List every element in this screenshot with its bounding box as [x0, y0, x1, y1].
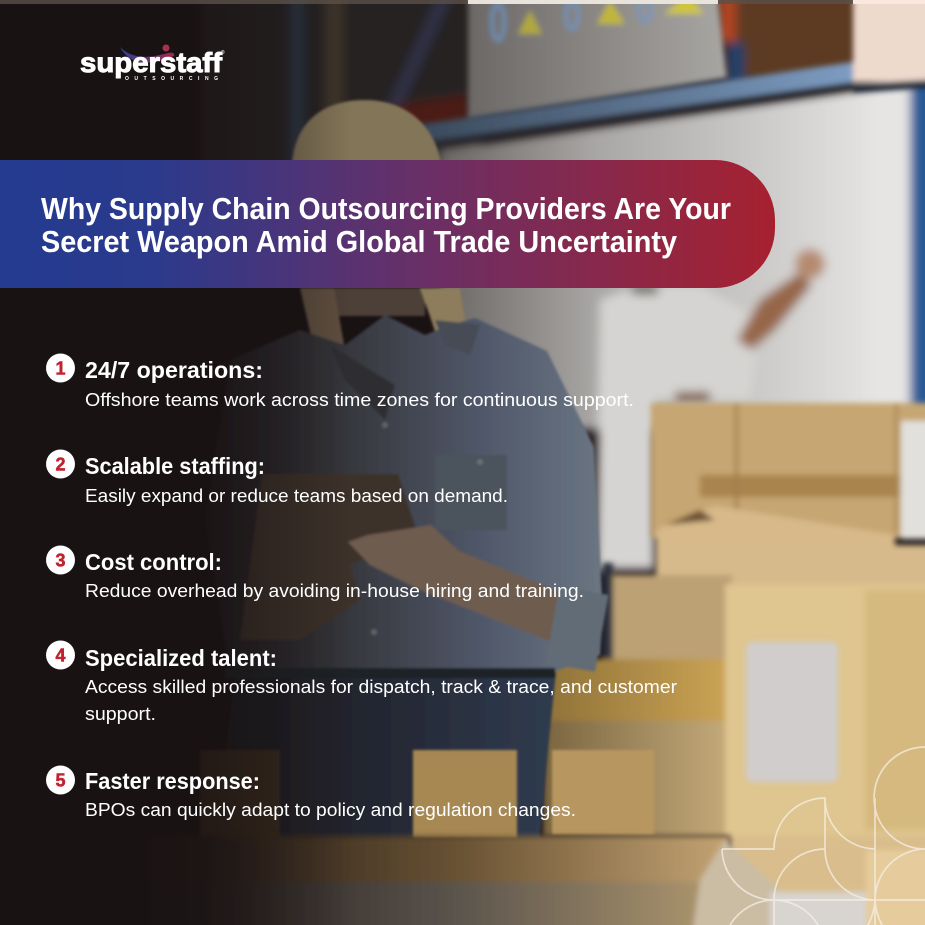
heading 4: Specialized talent: [85, 645, 277, 671]
cardboard boxes [543, 403, 925, 925]
logo registered mark: ® [221, 49, 225, 56]
title: Secret Weapon Amid Global Trade Uncertainty [41, 224, 678, 259]
number badge 4 [46, 640, 75, 670]
number badge 2: 2 [55, 454, 66, 474]
number badge 1: 1 [55, 358, 66, 378]
body 5: BPOs can quickly adapt to policy and regulation changes. [85, 800, 576, 820]
shirt [205, 315, 603, 672]
logo wordmark: superstaff [80, 47, 223, 78]
hair [292, 100, 442, 170]
forearm and hand [348, 525, 572, 650]
body 1: Offshore teams work across time zones for continuous support. [85, 390, 634, 410]
title banner [0, 160, 775, 288]
decorative geometric line pattern [722, 747, 925, 925]
top edge strip [0, 0, 925, 4]
body 4: support. [85, 704, 156, 724]
jeans [225, 672, 556, 838]
number badge 3 [46, 546, 75, 574]
body 2: Easily expand or reduce teams based on demand. [85, 486, 508, 506]
worker: hair, shirt, hands, jeans [205, 100, 609, 838]
banner shape [0, 160, 775, 288]
number badge 5: 5 [55, 770, 66, 790]
heading 1: 24/7 operations: [85, 357, 263, 383]
warehouse sign with symbols [468, 0, 727, 120]
number badge 5 [46, 766, 75, 794]
heading 2: Scalable staffing: [85, 453, 265, 479]
heading 5: Faster response: [85, 768, 260, 794]
number badge 3: 3 [55, 550, 66, 570]
heading 3: Cost control: [85, 549, 222, 575]
logo subline: OUTSOURCING [125, 76, 218, 82]
logo swoosh [120, 47, 174, 63]
box label [746, 642, 838, 782]
list item 5 [46, 766, 576, 820]
back shelving and wall [200, 0, 925, 570]
tablet [240, 474, 418, 640]
neck and face [330, 288, 425, 316]
number badge 1 [46, 354, 75, 382]
logo: superstaff outsourcing [80, 44, 225, 82]
title: Why Supply Chain Outsourcing Providers Are Your [41, 191, 731, 226]
list item 4 [46, 640, 677, 724]
number badge 4: 4 [55, 646, 66, 666]
list item 3 [46, 546, 584, 601]
shelf beam and salmon panel [395, 0, 925, 150]
front boxes and table [200, 750, 654, 846]
logo dot [162, 44, 170, 52]
body 4: Access skilled professionals for dispatch, track & trace, and customer [85, 677, 677, 697]
number badge 2 [46, 450, 75, 478]
list item 1 [46, 354, 634, 410]
list item 2 [46, 450, 508, 506]
body 3: Reduce overhead by avoiding in-house hiring and training. [85, 581, 584, 601]
